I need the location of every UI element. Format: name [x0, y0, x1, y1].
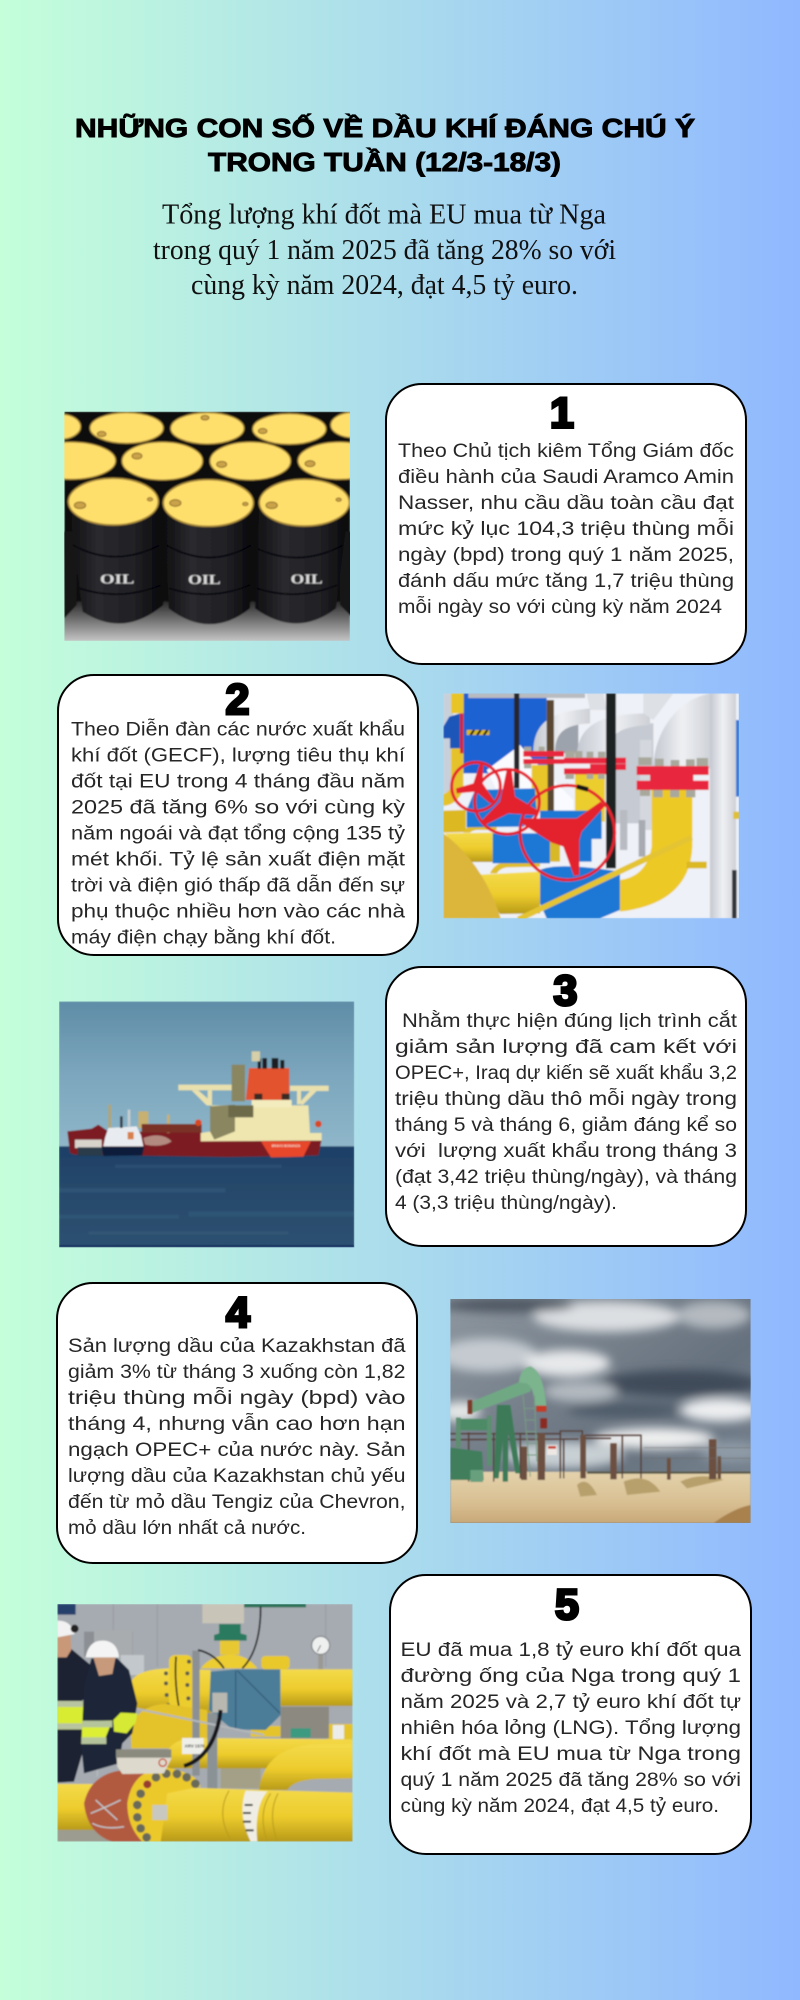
number 4: 4	[226, 1289, 250, 1337]
yellow risers	[532, 765, 548, 812]
fence	[450, 1431, 641, 1482]
text block 3: giảm sản lượng đã cam kết với	[395, 1037, 737, 1058]
number 2: 2	[226, 676, 249, 724]
panel: item 3	[386, 967, 746, 1246]
text block 2	[71, 718, 406, 948]
text block 5: quý 1 năm 2025 đã tăng 28% so với	[400, 1770, 741, 1791]
number 5: 5	[555, 1581, 579, 1629]
elbow	[259, 1744, 353, 1790]
text block 2: trời và điện gió thấp đã dẫn đến sự	[71, 874, 405, 896]
photo: oil barrels: OIL	[188, 573, 221, 588]
main upper pipe	[131, 1668, 211, 1713]
photo: yellow gas pipeline with workers	[57, 1604, 353, 1842]
text block 4: triệu thùng mỗi ngày (bpd) vào	[68, 1387, 406, 1409]
text block 4: giảm 3% từ tháng 3 xuống còn 1,82	[68, 1362, 406, 1383]
panel: item 1	[386, 384, 746, 664]
text block 3: Nhằm thực hiện đúng lịch trình cắt	[402, 1010, 738, 1032]
text block 5: năm 2025 và 2,7 tỷ euro khí đốt tự	[400, 1692, 741, 1713]
support post and sign	[192, 1651, 200, 1776]
text block 1: mức kỷ lục 104,3 triệu thùng mỗi	[398, 518, 734, 540]
title: TRONG TUẦN (12/3-18/3)	[208, 147, 561, 177]
text block 4: ngạch OPEC+ của nước này. Sản	[68, 1440, 406, 1461]
handrail	[135, 1706, 266, 1737]
funnel	[246, 1068, 289, 1100]
text block 4	[68, 1336, 406, 1539]
top valve	[202, 1604, 244, 1623]
lower flange left of blue box	[131, 1704, 207, 1748]
text block 3: triệu thùng dầu thô mỗi ngày trong	[395, 1088, 737, 1110]
text block 4: lượng dầu của Kazakhstan chủ yếu	[68, 1466, 406, 1487]
hull	[67, 1125, 322, 1157]
bridge wings	[178, 1085, 329, 1105]
blue valve bodies	[467, 788, 620, 918]
text block 5: EU đã mua 1,8 tỷ euro khí đốt qua	[400, 1640, 741, 1661]
red hand wheels	[452, 762, 615, 880]
text block 2: mét khối. Tỷ lệ sản xuất điện mặt	[71, 850, 406, 870]
text block 2: 2025 đã tăng 6% so với cùng kỳ	[71, 798, 406, 818]
text block 3: OPEC+, Iraq dự kiến sẽ xuất khẩu 3,2	[395, 1063, 737, 1084]
panel: item 5	[390, 1575, 751, 1854]
deck gear	[138, 1111, 148, 1128]
text block 2: máy điện chạy bằng khí đốt.	[71, 926, 336, 948]
black pole front	[606, 693, 616, 868]
number 1: 1	[550, 390, 574, 438]
wrap band	[242, 1791, 267, 1842]
text block 2: phụ thuộc nhiều hơn vào các nhà	[71, 902, 406, 922]
subtitle: cùng kỳ năm 2024, đạt 4,5 tỷ euro.	[191, 270, 578, 301]
superstructure	[201, 1105, 322, 1141]
flanges	[523, 751, 709, 790]
subtitle: trong quý 1 năm 2025 đã tăng 28% so với	[153, 235, 616, 266]
lower yellow pipes	[443, 810, 466, 833]
photo: oil barrels: OIL	[291, 572, 323, 587]
text block 1: Nasser, nhu cầu dầu toàn cầu đạt	[398, 493, 735, 514]
panel: item 4	[57, 1283, 417, 1563]
text block 3: tháng 5 và tháng 6, giảm đáng kể so	[395, 1115, 737, 1136]
photo: oil barrels	[64, 412, 350, 641]
gauge	[318, 1653, 323, 1670]
cables	[184, 1710, 221, 1766]
text block 2: năm ngoái và đạt tổng cộng 135 tỷ	[71, 824, 406, 844]
text block 4: tháng 4, nhưng vẫn cao hơn hạn	[68, 1413, 406, 1435]
subtitle: Tổng lượng khí đốt mà EU mua từ Nga	[162, 200, 607, 230]
text block 4: đến từ mỏ dầu Tengiz của Chevron,	[68, 1492, 405, 1513]
number 3: 3	[554, 967, 577, 1015]
diagonal yellow pipe	[518, 837, 692, 919]
photo: oil tanker at sea: BRAVO BONANZA	[272, 1144, 301, 1148]
text block 5: khí đốt mà EU mua từ Nga trong	[400, 1744, 741, 1765]
photo: oil tanker at sea	[59, 1001, 354, 1247]
text block 1: ngày (bpd) trong quý 1 năm 2025,	[398, 545, 734, 566]
text block 5: nhiên hóa lỏng (LNG). Tổng lượng	[400, 1718, 741, 1739]
main lower pipe	[57, 1784, 96, 1830]
pumpjack	[450, 1366, 546, 1482]
photo: gas pipes and red valves	[443, 693, 739, 919]
title: NHỮNG CON SỐ VỀ DẦU KHÍ ĐÁNG CHÚ Ý	[75, 113, 695, 143]
text block 5: đường ống của Nga trong quý 1	[400, 1666, 741, 1687]
text block 5: cùng kỳ năm 2024, đạt 4,5 tỷ euro.	[400, 1796, 719, 1817]
text block 2: đốt tại EU trong 4 tháng đầu năm	[71, 772, 405, 792]
small vessels	[75, 1140, 102, 1148]
subtitle	[153, 200, 616, 301]
text block 1: đánh dấu mức tăng 1,7 triệu thùng	[398, 571, 734, 592]
clouds	[437, 1298, 760, 1468]
text block 3: 4 (3,3 triệu thùng/ngày).	[395, 1193, 617, 1214]
upper grey pipes	[533, 708, 590, 753]
text block 3: (đạt 3,42 triệu thùng/ngày), và tháng	[395, 1167, 737, 1188]
workers	[57, 1648, 94, 1783]
second horizontal pipe	[166, 1738, 353, 1768]
photo: pumpjack in a field	[437, 1298, 760, 1523]
poles	[514, 693, 519, 788]
yellow left riser and blue valve	[451, 693, 464, 713]
text block 3	[395, 1010, 738, 1214]
text block 1	[398, 441, 735, 618]
text block 2: khí đốt (GECF), lượng tiêu thụ khí	[71, 746, 406, 766]
panel: item 2	[58, 675, 418, 955]
text block 5	[400, 1640, 741, 1817]
text block 1: Theo Chủ tịch kiêm Tổng Giám đốc	[398, 441, 734, 462]
photo: yellow gas pipeline with workers: ARV 1570	[185, 1744, 205, 1749]
text block 4: Sản lượng dầu của Kazakhstan đã	[68, 1336, 406, 1357]
blue actuator	[209, 1669, 281, 1730]
text block 4: mỏ dầu lớn nhất cả nước.	[68, 1518, 306, 1539]
text block 2: Theo Diễn đàn các nước xuất khẩu	[71, 718, 405, 740]
title	[75, 113, 695, 177]
photo: oil barrels: OIL	[100, 572, 134, 587]
text block 3: với lượng xuất khẩu trong tháng 3	[395, 1141, 737, 1162]
text block 1: điều hành của Saudi Aramco Amin	[398, 467, 734, 488]
text block 1: mỗi ngày so với cùng kỳ năm 2024	[398, 596, 722, 618]
